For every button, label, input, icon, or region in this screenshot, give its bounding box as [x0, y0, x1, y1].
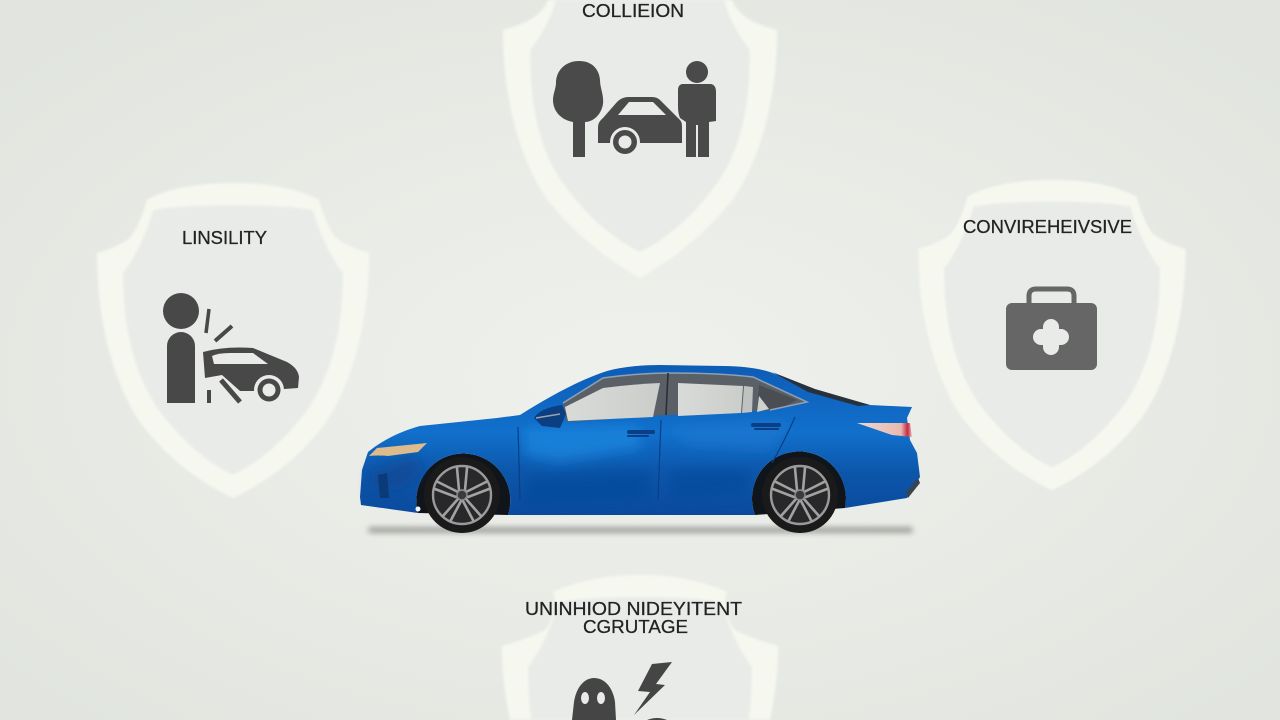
- car shadow: [368, 527, 913, 533]
- rear window: [678, 383, 743, 416]
- front window: [565, 383, 660, 421]
- rear glass strip: [742, 386, 753, 413]
- wheel wells: [416, 451, 846, 515]
- door handles: [627, 423, 781, 437]
- icon: person: [163, 293, 199, 403]
- rear quarter window: [757, 385, 797, 412]
- icon: tree, car and person: [553, 61, 716, 157]
- pillar line: [666, 373, 668, 415]
- tail light: [857, 423, 912, 437]
- panel: comprehensive shield: [918, 180, 1186, 490]
- rear roof dark glass edge: [772, 372, 870, 406]
- icon: person hit by car: [163, 293, 299, 405]
- rear exhaust trim: [906, 478, 920, 498]
- heading: uninsured motorist coverage: UNINHIOD NIDEYITENT: [525, 599, 742, 619]
- window surround: [563, 373, 807, 422]
- icon: ghost: [572, 678, 616, 720]
- side mirror: [534, 405, 566, 428]
- icon: lightning bolt: [634, 662, 672, 715]
- heading: uninsured motorist coverage: CGRUTAGE: [583, 617, 688, 637]
- heading: uninsured motorist coverage: [525, 599, 742, 637]
- headlight: [369, 443, 427, 456]
- heading: liability: LINSILITY: [182, 228, 267, 248]
- icon: partial object below bolt: [647, 718, 667, 720]
- door lines: [518, 417, 795, 500]
- window top trim: [563, 373, 807, 410]
- panel: collision shield: [503, 0, 777, 278]
- heading: collision: COLLIEION: [582, 1, 684, 21]
- icon: person: [678, 61, 716, 157]
- body highlights: [370, 420, 790, 505]
- heading: comprehensive: CONVIREHEIVSIVE: [963, 217, 1132, 237]
- icon: medical kit: [1006, 289, 1097, 370]
- car: blue sedan side view: [360, 365, 920, 533]
- icon: car: [598, 97, 682, 157]
- rear wheel: [762, 457, 838, 533]
- icon: car: [203, 348, 299, 405]
- light spot near front wheel: [416, 506, 420, 512]
- car body: [360, 365, 920, 515]
- icon: tree: [553, 61, 603, 157]
- panel: liability shield: [97, 183, 369, 498]
- front wheel: [424, 457, 500, 533]
- icon: impact lines: [206, 309, 240, 403]
- panel: uninsured motorist shield: [502, 575, 778, 720]
- fog vent: [378, 473, 389, 498]
